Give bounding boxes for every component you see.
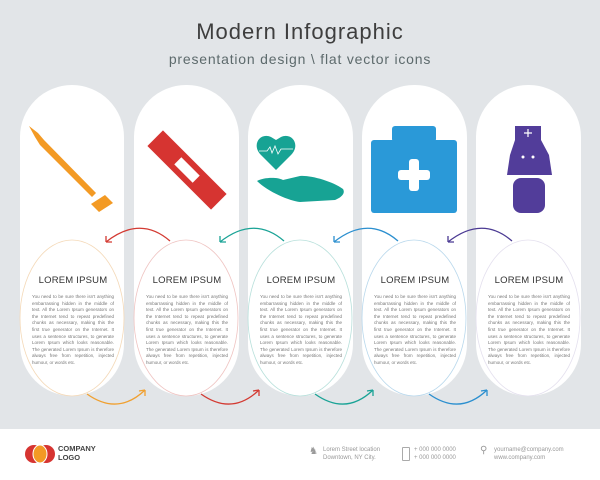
title: Modern Infographic xyxy=(196,19,404,44)
contact: address: ♞ xyxy=(309,446,318,457)
oval outlines xyxy=(20,240,580,396)
text: column 2: LOREM IPSUM xyxy=(153,275,221,286)
contact: address: Downtown, NY City. xyxy=(323,455,376,461)
footer xyxy=(0,429,600,480)
icon: nurse xyxy=(507,126,552,213)
text: column 5: You need to be sure there isn't anything embarrassing hidden in the middle of text. All the Lorem Ipsum generators on the Internet tend to repeat predefined chunks as necessary, making this the first true generator on the Internet. It uses a sentence structures, to generate Lorem Ipsum which looks reasonable. The generated Lorem Ipsum is therefore always free from repetition, injected humour, or words etc. xyxy=(488,294,570,365)
text: column 2: You need to be sure there isn't anything embarrassing hidden in the middle of text. All the Lorem Ipsum generators on the Internet tend to repeat predefined chunks as necessary, making this the first true generator on the Internet. It uses a sentence structures, to generate Lorem Ipsum which looks reasonable. The generated Lorem Ipsum is therefore always free from repetition, injected humour, or words etc. xyxy=(146,294,228,365)
icon: medical kit xyxy=(371,126,457,213)
bottom arrows xyxy=(87,390,487,404)
text: column 5: LOREM IPSUM xyxy=(495,275,563,286)
text: column 3: You need to be sure there isn't anything embarrassing hidden in the middle of text. All the Lorem Ipsum generators on the Internet tend to repeat predefined chunks as necessary, making this the first true generator on the Internet. It uses a sentence structures, to generate Lorem Ipsum which looks reasonable. The generated Lorem Ipsum is therefore always free from repetition, injected humour, or words etc. xyxy=(260,294,342,365)
contact: email: ⚲ xyxy=(480,445,487,456)
company logo: LOGO xyxy=(58,452,80,462)
icon: pencil xyxy=(29,126,113,212)
company logo xyxy=(25,444,96,463)
contact: phone: + 000 000 0000 xyxy=(414,455,456,461)
contact: address xyxy=(309,446,380,461)
contact: email: yourname@company.com xyxy=(494,447,564,453)
company logo: COMPANY xyxy=(58,444,96,453)
contact: email: www.company.com xyxy=(494,455,545,461)
pills xyxy=(20,85,581,396)
contact: email xyxy=(480,445,564,461)
contact: address: Lorem Street location xyxy=(323,447,380,453)
text: column 4: LOREM IPSUM xyxy=(381,275,449,286)
contact: phone xyxy=(402,446,456,461)
text: column 1: You need to be sure there isn't anything embarrassing hidden in the middle of text. All the Lorem Ipsum generators on the Internet tend to repeat predefined chunks as necessary, making this the first true generator on the Internet. It uses a sentence structures, to generate Lorem Ipsum which looks reasonable. The generated Lorem Ipsum is therefore always free from repetition, injected humour, or words etc. xyxy=(32,294,114,365)
text: column 1: LOREM IPSUM xyxy=(39,275,107,286)
text: column 3: LOREM IPSUM xyxy=(267,275,335,286)
text: column 4: You need to be sure there isn't anything embarrassing hidden in the middle of text. All the Lorem Ipsum generators on the Internet tend to repeat predefined chunks as necessary, making this the first true generator on the Internet. It uses a sentence structures, to generate Lorem Ipsum which looks reasonable. The generated Lorem Ipsum is therefore always free from repetition, injected humour, or words etc. xyxy=(374,294,456,365)
subtitle: presentation design \ flat vector icons xyxy=(169,51,431,67)
top arrows xyxy=(106,228,512,242)
contact: phone: + 000 000 0000 xyxy=(414,447,456,453)
icon: ruler xyxy=(147,130,227,210)
icon: heart in hand xyxy=(257,136,344,202)
